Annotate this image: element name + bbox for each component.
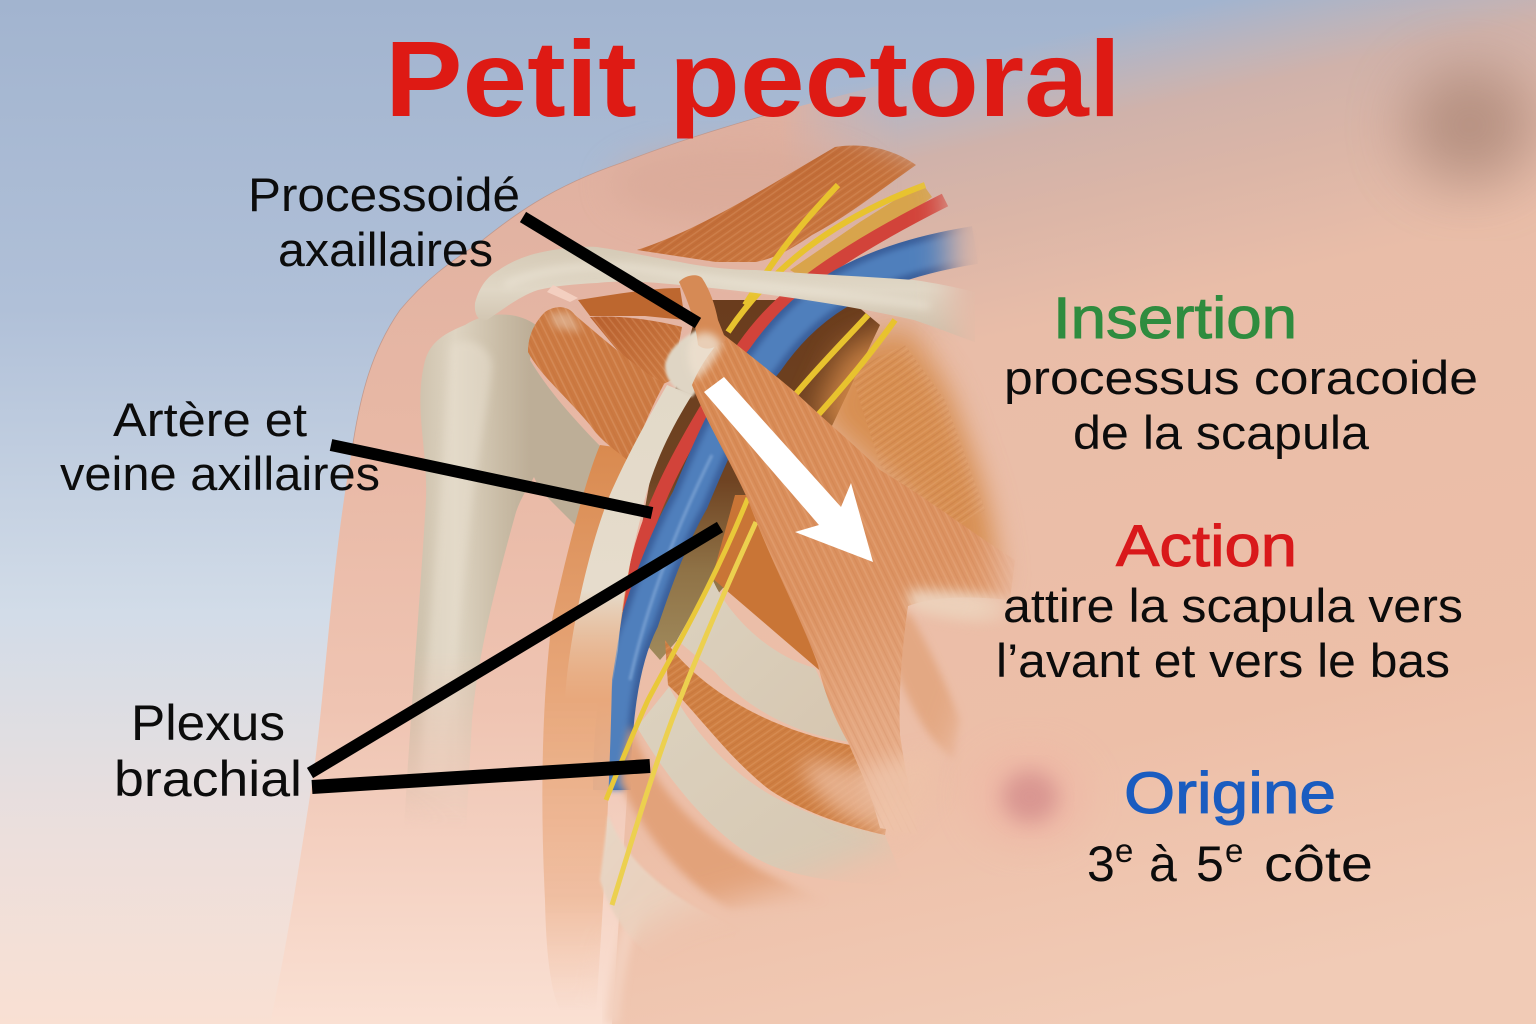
block: action: l’avant et vers le bas bbox=[996, 634, 1450, 687]
block: origine: côte bbox=[1264, 836, 1373, 892]
block: origine: e bbox=[1225, 832, 1243, 869]
block: insertion: Insertion bbox=[1053, 286, 1297, 351]
rib 2 bbox=[637, 687, 905, 885]
pale nerve sheath above clavicle bbox=[790, 188, 932, 274]
label: artere et veine axillaires bbox=[60, 393, 380, 500]
lower slip of muscle, pale right bbox=[885, 610, 960, 760]
artery bbox=[628, 200, 945, 612]
humerus bbox=[404, 314, 601, 830]
shading: shoulder bbox=[610, 145, 870, 225]
label: processoide axaillaires bbox=[248, 168, 520, 276]
label: processoide axaillaires: Processoidé bbox=[248, 168, 520, 221]
nerve lower right bbox=[612, 522, 756, 905]
leader line: artere et veine bbox=[331, 445, 652, 513]
slip fading bbox=[860, 750, 950, 850]
nipple bbox=[1002, 771, 1058, 823]
long arm muscle strip bbox=[542, 445, 640, 1010]
subscapular muscle bbox=[590, 317, 682, 390]
block: origine: 5 bbox=[1196, 836, 1224, 892]
block: insertion bbox=[1004, 286, 1478, 459]
block: action bbox=[996, 514, 1463, 687]
block: origine bbox=[1087, 761, 1373, 892]
block: origine: à bbox=[1149, 836, 1177, 892]
pectoralis minor muscle bbox=[692, 335, 1015, 850]
acromion and clavicle bbox=[475, 247, 975, 342]
block: insertion: processus coracoide bbox=[1004, 351, 1478, 404]
shading: arm and chest seam bbox=[612, 880, 645, 1024]
intercostal muscle middle bbox=[665, 640, 900, 835]
vein dark edge bbox=[612, 245, 975, 790]
leader line: plexus lower bbox=[312, 766, 650, 787]
supraspinatus muscle bbox=[578, 288, 685, 320]
block: origine: e bbox=[1115, 832, 1133, 869]
block: insertion: de la scapula bbox=[1073, 406, 1370, 459]
pectoral fan behind bbox=[815, 325, 1020, 585]
label: plexus brachial bbox=[114, 695, 302, 807]
leader line: processoide bbox=[523, 217, 698, 323]
pale ligament bbox=[547, 285, 578, 302]
highlight on vein bbox=[630, 455, 712, 680]
nerve upper 1 bbox=[745, 185, 838, 305]
leader line: plexus upper bbox=[310, 527, 720, 773]
label: artere et veine axillaires: Artère et bbox=[113, 393, 307, 446]
label: plexus brachial: brachial bbox=[114, 751, 302, 807]
label: plexus brachial: Plexus bbox=[131, 695, 285, 751]
vein bbox=[612, 245, 975, 790]
deep muscle upper bbox=[712, 495, 825, 675]
block: action: Action bbox=[1116, 514, 1297, 579]
white direction arrow bbox=[704, 377, 873, 562]
fan fibres bbox=[850, 345, 985, 530]
block: origine: Origine bbox=[1124, 761, 1336, 826]
shading: top right shadow bbox=[1406, 67, 1534, 183]
nerve upper 2 bbox=[728, 185, 925, 332]
anatomy window bbox=[404, 146, 1020, 1010]
trapezius muscle bbox=[637, 146, 916, 262]
nerve lower left bbox=[606, 498, 748, 800]
intercostal muscle low bbox=[616, 724, 801, 909]
title: Petit pectoral bbox=[385, 18, 1121, 139]
deep shadow behind vessels bbox=[625, 300, 880, 660]
nerve lower branch 3 bbox=[795, 315, 868, 395]
nerve lower branch 4 bbox=[818, 320, 895, 415]
nipple halo bbox=[970, 747, 1090, 847]
label: processoide axaillaires: axaillaires bbox=[278, 223, 493, 276]
rib 3 bbox=[599, 816, 692, 933]
coracoid process bbox=[665, 325, 717, 397]
shoulder outline bbox=[352, 114, 770, 450]
block: origine: 3 bbox=[1087, 836, 1115, 892]
pale tendon end bbox=[908, 590, 1015, 622]
block: action: attire la scapula vers bbox=[1003, 579, 1463, 632]
deltoid band muscle bbox=[528, 307, 664, 462]
label: artere et veine axillaires: veine axillaires bbox=[60, 447, 380, 500]
tendon over clavicle bbox=[679, 275, 726, 380]
rib 1 bbox=[677, 578, 850, 742]
bone strip white bbox=[565, 385, 692, 700]
